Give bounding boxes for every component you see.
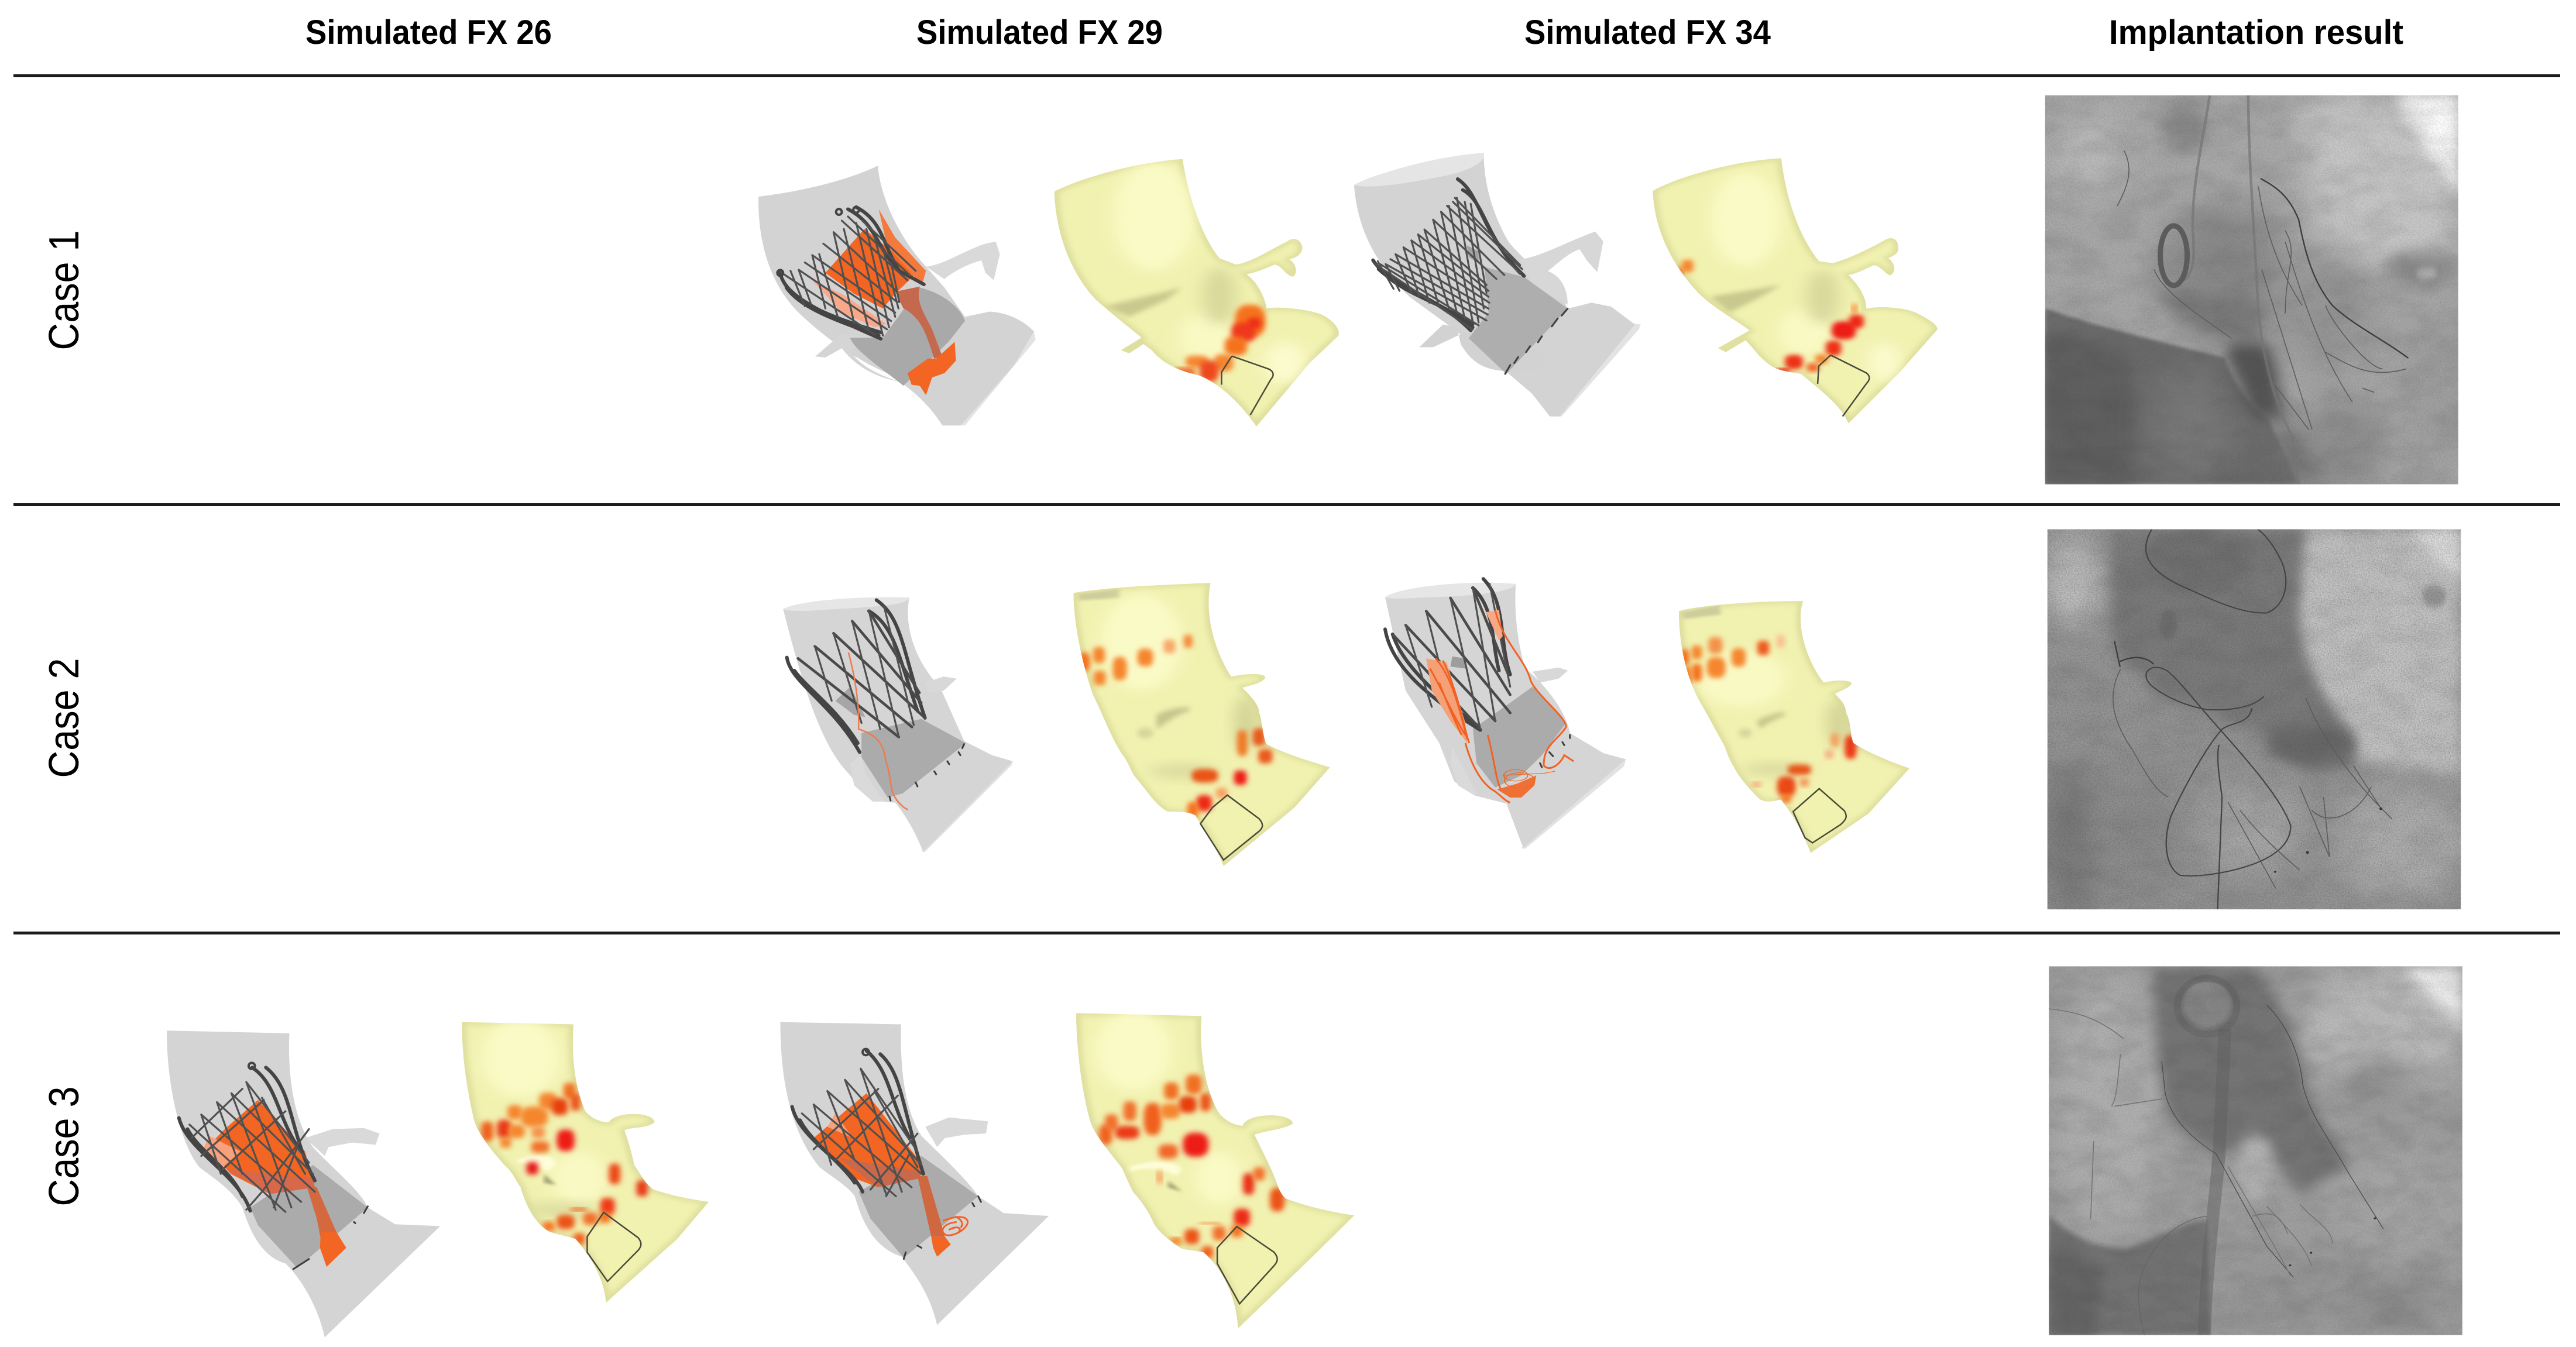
row label: Case 2: Case 2 <box>41 658 88 778</box>
panel: Case 1 implantation X-ray <box>2045 95 2484 484</box>
panel: Case 1 simulated FX 29 <box>758 159 1339 427</box>
transparent aorta with stent and orange flow <box>167 1030 440 1338</box>
panel: Case 3 implantation X-ray <box>2049 964 2470 1335</box>
panel: Case 2 simulated FX 34 <box>1385 579 1909 853</box>
yellow aorta with contact hot spots <box>1076 1011 1354 1328</box>
transparent aorta with stent and thin flow line <box>783 597 1013 852</box>
yellow aorta with contact hot spots <box>1055 159 1339 427</box>
yellow aorta with contact hot spots <box>1679 601 1909 853</box>
panel: Case 1 simulated FX 34 <box>1354 153 1938 423</box>
heading: Implantation result: Implantation result <box>2109 13 2403 51</box>
heading: Simulated FX 26: Simulated FX 26 <box>305 13 552 51</box>
transparent aorta with stent and flow threads <box>1385 579 1626 849</box>
panel: Case 3 simulated FX 29 <box>780 1011 1354 1328</box>
yellow aorta with contact hot spots <box>1653 159 1938 423</box>
panel: Case 2 simulated FX 29 <box>783 583 1330 866</box>
panel: Case 2 implantation X-ray <box>2040 528 2467 920</box>
yellow aorta with contact hot spots <box>1073 583 1330 866</box>
transparent aorta with stent and orange flow <box>758 166 1036 425</box>
yellow aorta with contact hot spots <box>462 1017 709 1303</box>
panel: Case 3 simulated FX 26 <box>167 1017 709 1338</box>
heading: Simulated FX 34: Simulated FX 34 <box>1524 13 1771 51</box>
transparent aorta with stent and orange flow <box>780 1022 1049 1325</box>
heading: Simulated FX 29: Simulated FX 29 <box>916 13 1163 51</box>
row label: Case 1: Case 1 <box>41 231 88 350</box>
row label: Case 3: Case 3 <box>41 1086 88 1207</box>
transparent aorta with stent, no flow <box>1354 153 1641 417</box>
header row <box>305 13 2403 51</box>
